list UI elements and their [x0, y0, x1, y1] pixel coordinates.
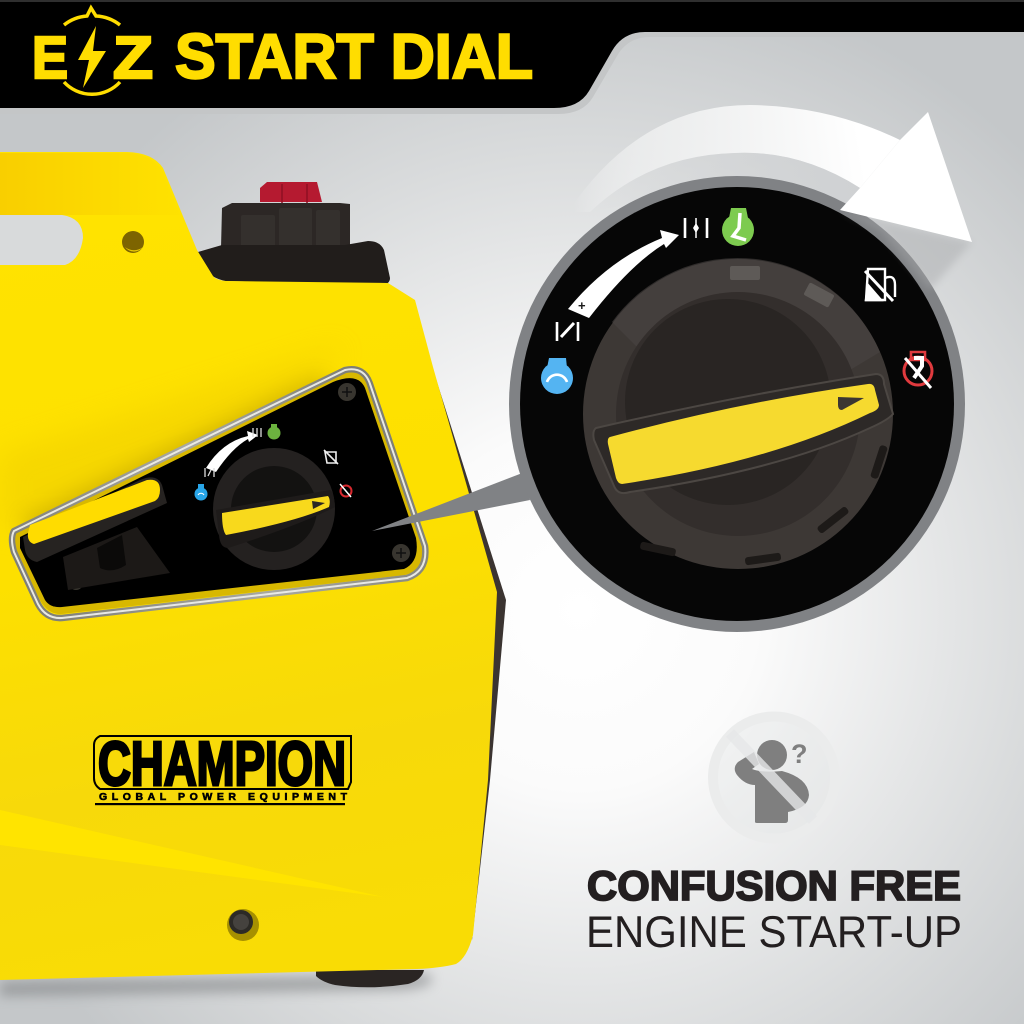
knob [583, 258, 893, 569]
highlight facet [0, 810, 383, 897]
screws [69, 383, 410, 590]
header banner [0, 0, 1024, 114]
arrow head [840, 112, 972, 242]
choke closed icon [557, 322, 578, 341]
small dial [213, 448, 335, 570]
chrome-framed control panel [12, 369, 425, 618]
callout wedge [372, 472, 530, 531]
body shading [0, 345, 345, 530]
arrow head shadow [840, 210, 972, 290]
logo: EZ with lightning bolt: E [32, 25, 68, 91]
setting arrow: + [578, 298, 586, 313]
handle hole [0, 215, 83, 265]
rear dark panel [430, 360, 506, 940]
caption: engine start-up: ENGINE START-UP [586, 908, 962, 957]
floor shadow [0, 974, 432, 996]
icon: engine off [904, 352, 932, 388]
question mark: ? [791, 739, 808, 769]
setting arrow [568, 230, 679, 318]
black face [520, 187, 954, 621]
base [198, 241, 390, 285]
pointer [838, 397, 864, 410]
yellow body [0, 152, 497, 980]
generator [0, 152, 506, 996]
drain hole [227, 909, 259, 941]
logo: EZ with lightning bolt: Z [113, 25, 153, 91]
Champion logo: GLOBAL POWER EQUIPMENT [99, 791, 348, 803]
chrome stroke [12, 369, 425, 618]
handle band [593, 374, 893, 493]
caption: confusion free: CONFUSION FREE [587, 862, 961, 909]
title: START DIAL [175, 22, 533, 92]
person [735, 740, 809, 823]
icon: blue engine [541, 358, 573, 394]
ring [509, 176, 965, 632]
black plate [20, 378, 417, 607]
icon: green start [722, 208, 754, 246]
Champion logo: CHAMPION [98, 730, 346, 799]
knob [221, 203, 350, 248]
Champion logo [94, 730, 351, 805]
magnified dial [509, 176, 965, 632]
red button [260, 182, 322, 202]
confusion free icon [713, 716, 835, 838]
pull handle [23, 477, 167, 562]
yellow grip [608, 384, 879, 484]
slash [730, 733, 813, 820]
pull-start base [63, 527, 170, 590]
panel shadow [20, 375, 340, 545]
yellow recess [14, 372, 423, 614]
foot [316, 970, 424, 987]
logo: EZ with lightning bolt [32, 8, 153, 94]
icon: fuel off [865, 269, 895, 301]
small dial icons [194, 424, 352, 500]
curved white arrow shaft [568, 105, 900, 215]
handle highlight [0, 153, 180, 215]
choke open icon [685, 218, 707, 238]
fuel cap [198, 182, 390, 285]
